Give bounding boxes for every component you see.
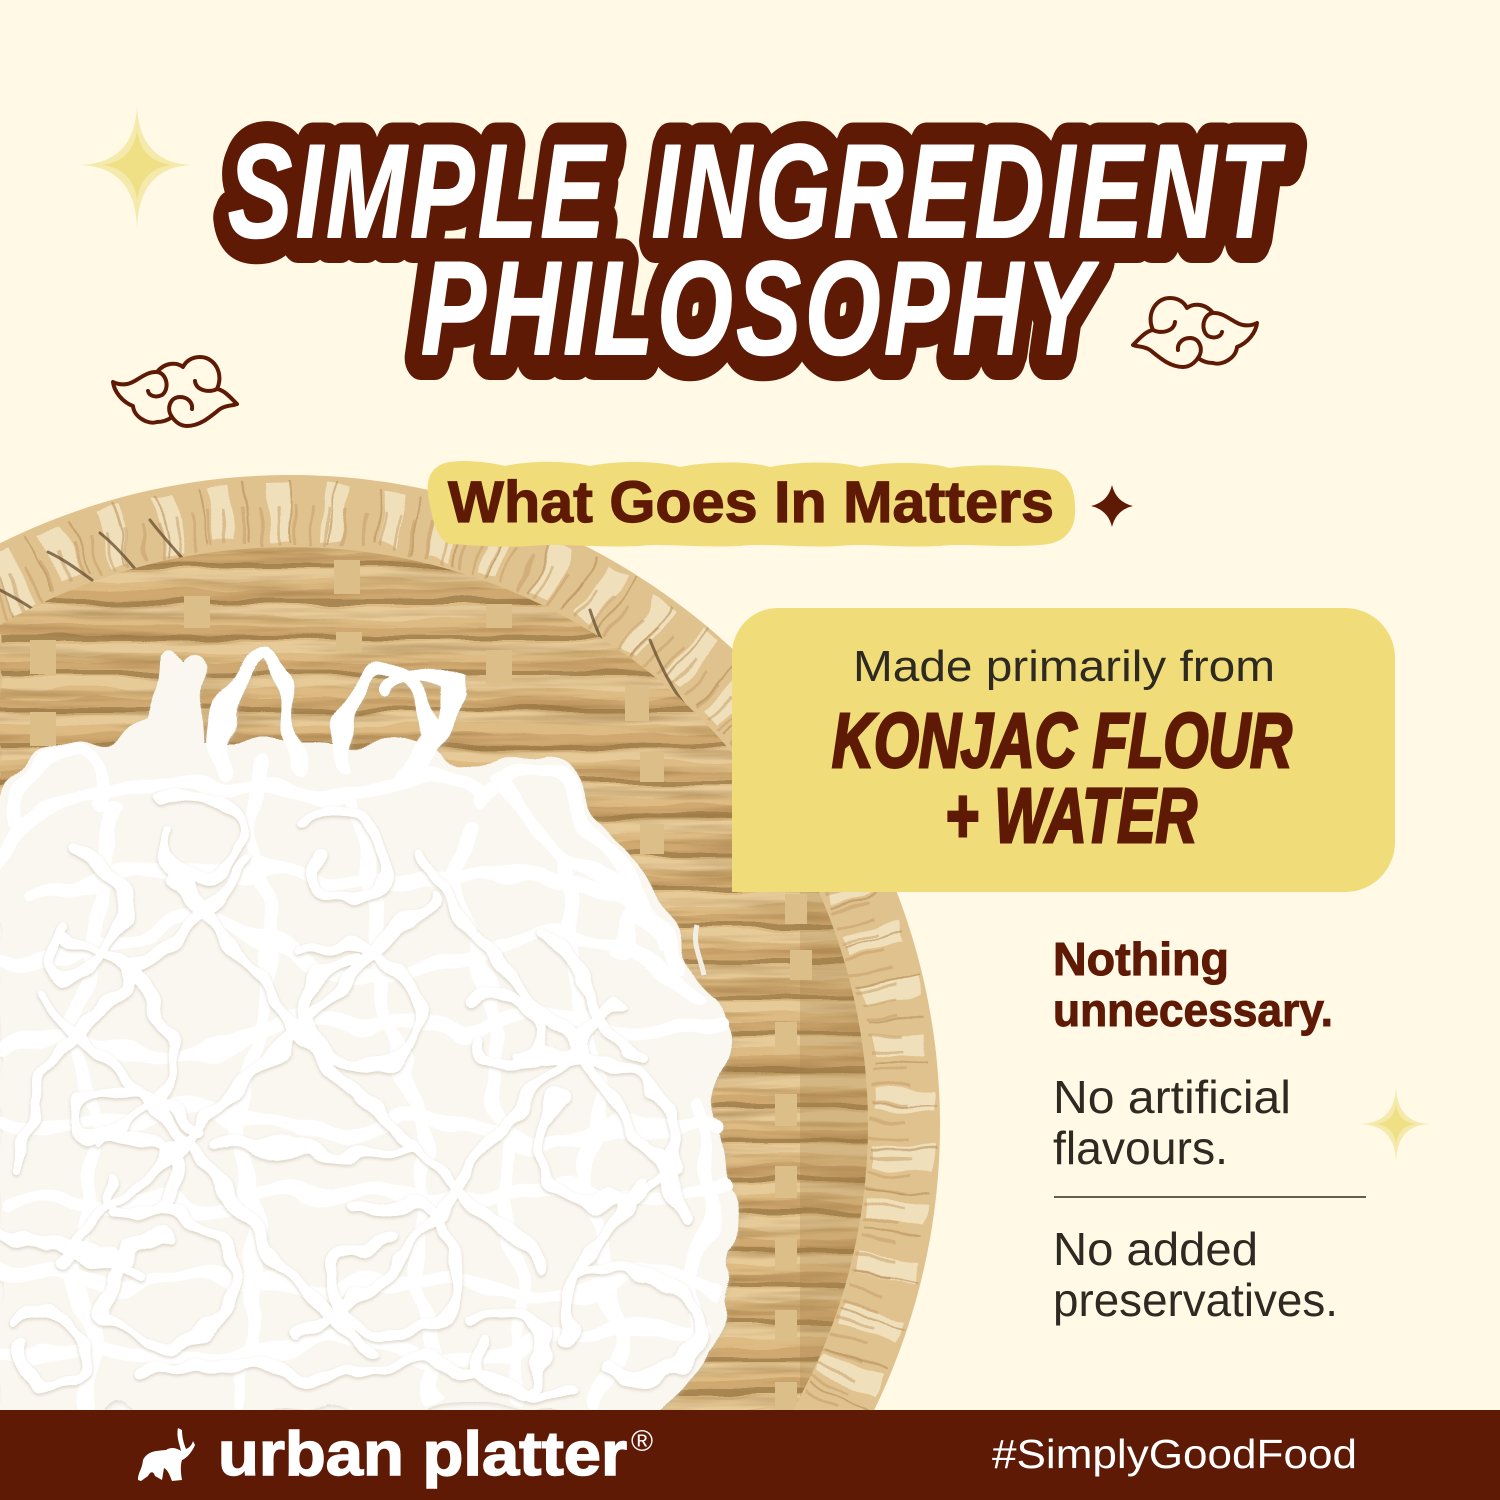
- icon: dark sparkle: [1091, 485, 1133, 527]
- text block: no artificial flavours: [1053, 1071, 1291, 1174]
- icon: cloud left: [113, 357, 237, 426]
- title lettering: [228, 118, 1285, 383]
- basket rim: [0, 475, 940, 1410]
- text block: no added preservatives: No added: [1053, 1223, 1258, 1275]
- subheading pill: [428, 461, 1075, 547]
- icon: elephant logo: [138, 1428, 195, 1481]
- text block: no artificial flavours: No artificial: [1053, 1071, 1291, 1123]
- noodle mass and loops: [0, 655, 734, 1410]
- title outline: PHILOSOPHY: [419, 239, 1097, 387]
- brand name: urban platter: [218, 1420, 627, 1489]
- noodle loops foreground: [0, 795, 700, 1395]
- icon: small sparkle: [1360, 1086, 1430, 1162]
- callout intro text: Made primarily from: [853, 642, 1275, 691]
- callout highlight line 1: KONJAC FLOUR: [832, 698, 1292, 784]
- text block: nothing unnecessary: Nothing: [1053, 933, 1229, 985]
- photo: bamboo basket with konjac noodles: [0, 475, 960, 1410]
- text block: no added preservatives: preservatives.: [1053, 1274, 1338, 1326]
- registered mark: ®: [631, 1425, 653, 1458]
- icon: cloud right: [1133, 298, 1257, 367]
- footer band: [0, 1410, 1500, 1500]
- noodle pile: [0, 655, 734, 1410]
- noodle stray strand: [695, 925, 704, 975]
- panel: konjac flour callout: [732, 608, 1395, 892]
- text block: no artificial flavours: flavours.: [1053, 1122, 1228, 1174]
- hashtag: #SimplyGoodFood: [992, 1431, 1357, 1477]
- title lettering: PHILOSOPHY: [421, 235, 1099, 383]
- basket woven base: [0, 547, 868, 1410]
- text block: nothing unnecessary: unnecessary.: [1053, 984, 1333, 1036]
- rim dark reed streaks: [0, 520, 690, 712]
- title outline: PHILOSOPHY: [421, 233, 1099, 381]
- text block: nothing unnecessary: [1053, 933, 1333, 1036]
- title outline: [228, 117, 1291, 387]
- subheading text: What Goes In Matters: [448, 470, 1054, 535]
- title: [228, 117, 1291, 387]
- icon: large sparkle: [80, 105, 192, 228]
- text block: no added preservatives: [1053, 1223, 1338, 1326]
- callout highlight line 2: + WATER: [945, 773, 1197, 859]
